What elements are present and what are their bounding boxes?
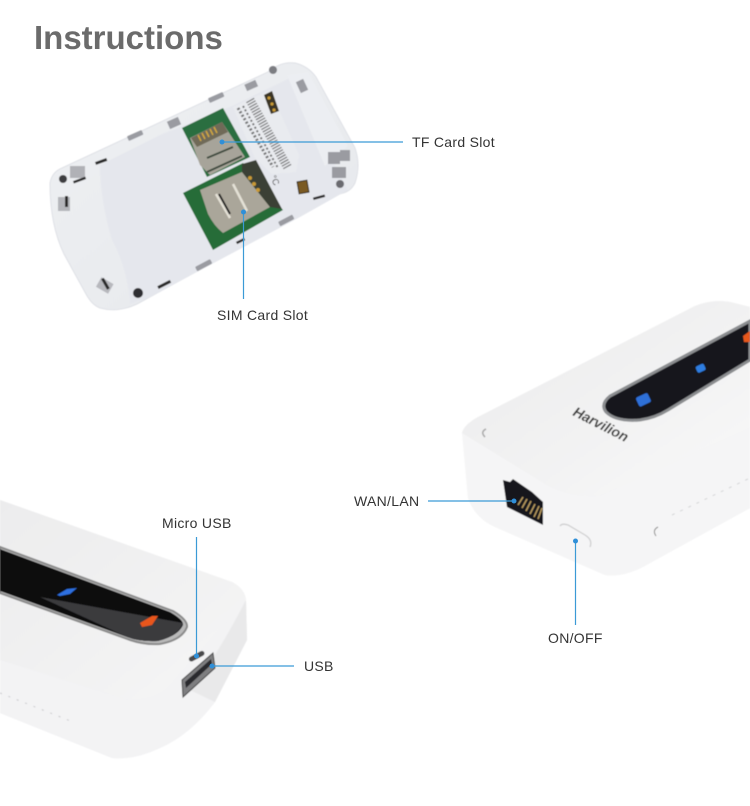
callout: TF Card Slot bbox=[220, 134, 495, 150]
ethernet port bbox=[503, 479, 543, 525]
device body bbox=[0, 500, 247, 758]
blue indicator light bbox=[57, 588, 77, 596]
contact pins bbox=[264, 91, 279, 114]
callout: USB bbox=[210, 658, 334, 674]
top face bbox=[0, 500, 246, 700]
device: front view with WAN/LAN port bbox=[462, 301, 750, 576]
callout: WAN/LAN bbox=[354, 493, 516, 509]
brand name: Harvilion bbox=[571, 403, 631, 445]
temperature mark: °C bbox=[268, 174, 282, 187]
callout: USB: USB bbox=[304, 658, 334, 674]
callout: ON/OFF bbox=[548, 538, 603, 646]
end face shading bbox=[190, 600, 247, 702]
power icon bbox=[654, 527, 658, 536]
vent dots bbox=[0, 693, 73, 722]
device: back view with open cover bbox=[50, 63, 358, 310]
TF card slot board bbox=[182, 108, 250, 177]
front lower side bbox=[0, 600, 247, 758]
antenna connector bbox=[297, 180, 309, 194]
black indicator panel bbox=[604, 321, 750, 420]
case slots and clips bbox=[58, 79, 350, 294]
callout: SIM Card Slot: SIM Card Slot bbox=[217, 307, 308, 323]
orange indicator light bbox=[743, 331, 750, 342]
title: Instructions bbox=[34, 19, 223, 56]
callout: Micro USB bbox=[162, 515, 232, 658]
callout: WAN/LAN: WAN/LAN bbox=[354, 493, 419, 509]
micro USB port bbox=[188, 650, 205, 662]
device: rear view with USB ports bbox=[0, 500, 247, 758]
callout: Micro USB: Micro USB bbox=[162, 515, 232, 531]
device back shell bbox=[50, 63, 358, 310]
label sticker bbox=[233, 90, 299, 174]
power button bbox=[560, 524, 591, 547]
device body bbox=[462, 301, 750, 576]
USB port bbox=[182, 653, 215, 697]
corner mark bbox=[483, 429, 486, 437]
orange indicator light bbox=[140, 616, 158, 627]
blue indicator lights bbox=[635, 393, 651, 407]
callout: SIM Card Slot bbox=[217, 210, 308, 323]
top face bbox=[462, 301, 750, 496]
callout: TF Card Slot: TF Card Slot bbox=[412, 134, 495, 150]
black indicator panel bbox=[0, 547, 187, 644]
SIM card slot board bbox=[183, 163, 283, 250]
screw holes bbox=[59, 175, 67, 183]
callout: ON/OFF: ON/OFF bbox=[548, 630, 603, 646]
vent dots bbox=[672, 478, 750, 515]
